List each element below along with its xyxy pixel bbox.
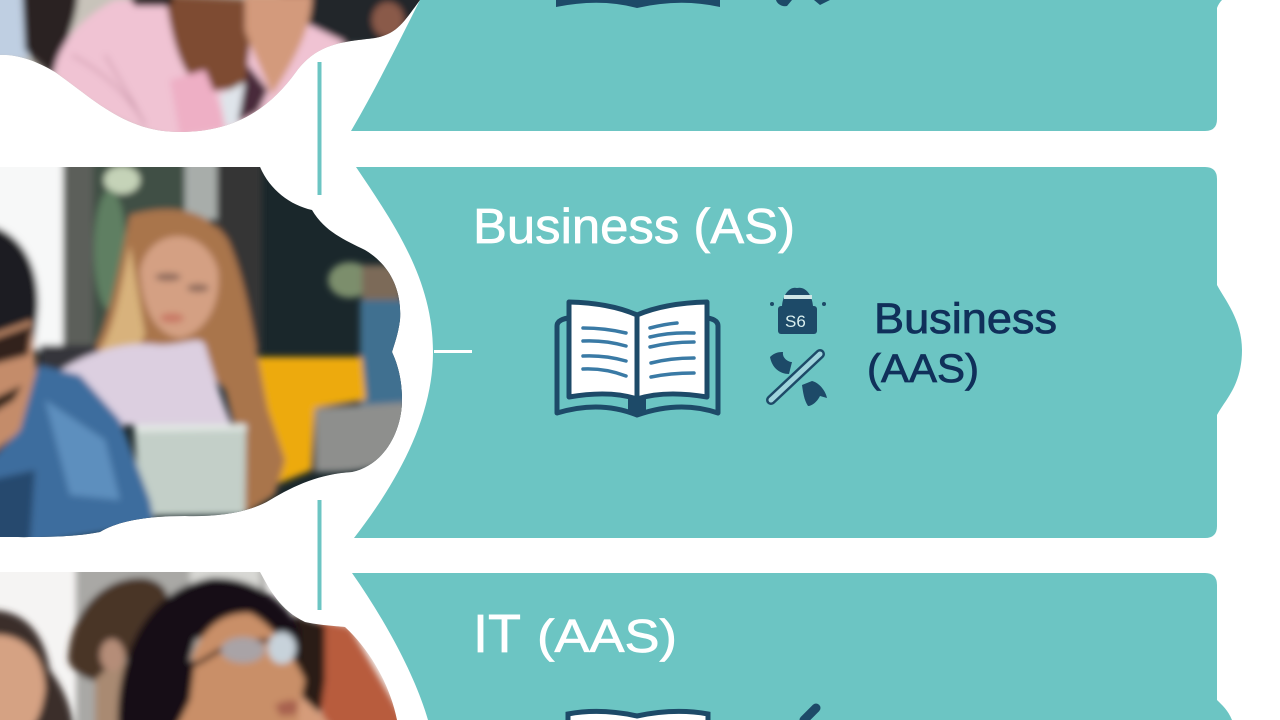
heading: Business (AS): Business (AS) (473, 200, 795, 254)
icon: calendar with S6: S6 (785, 312, 806, 331)
text: Business (AAS) label: Business (874, 295, 1057, 343)
panel: IT (AAS) teal card (352, 573, 1232, 720)
icon: calendar with S6 (770, 288, 826, 334)
connector: upper vertical line (318, 62, 322, 195)
icon: cropped tool at top (776, 0, 830, 6)
text: Business (AAS) label: (AAS) (867, 347, 979, 391)
heading: IT (AAS): (AAS) (537, 610, 677, 662)
photo: students with laptops (0, 167, 402, 538)
connector: lower vertical line (318, 500, 322, 610)
icon: cropped tool at bottom (804, 708, 816, 720)
icon: cropped book at bottom (568, 711, 708, 720)
photo: student in pink shirt (0, 0, 430, 140)
connector: white tick (434, 350, 472, 353)
icon: ruler and wrench (770, 352, 827, 406)
heading: IT (AAS): IT (473, 604, 521, 664)
panel: top teal card (351, 0, 1222, 131)
icon: cropped book at top (556, 0, 720, 8)
photo: students looking up (0, 572, 397, 720)
icon: open book (557, 302, 718, 417)
heading: IT (AAS) (473, 604, 677, 664)
panel: Business (AS) teal card (354, 167, 1242, 538)
text: Business (AAS) label (867, 295, 1057, 391)
